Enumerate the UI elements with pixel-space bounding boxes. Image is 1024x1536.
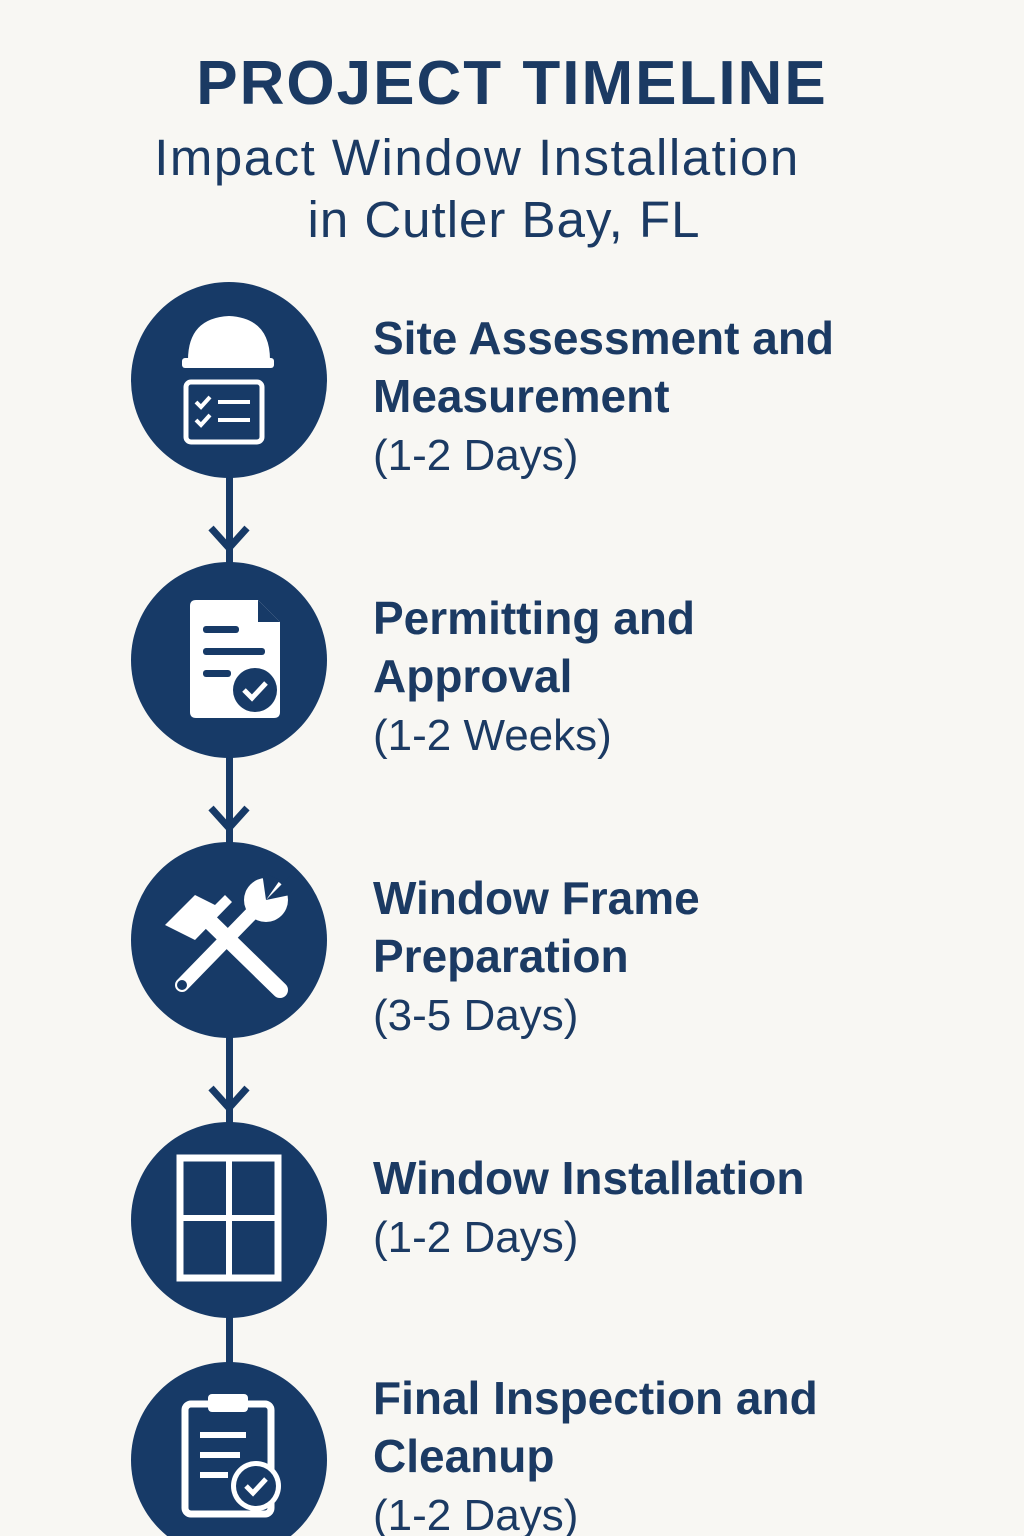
- icon: hard hat and checklist: [131, 282, 327, 478]
- text: step 3: (3-5 Days): [373, 991, 578, 1040]
- icon: document with check: [131, 562, 327, 758]
- timeline connector line: [211, 470, 247, 1370]
- text: step 5: Cleanup: [373, 1430, 554, 1482]
- text: step 2: Approval: [373, 650, 572, 702]
- icon: hammer and wrench: [131, 842, 327, 1038]
- text: step 3: [373, 872, 700, 1040]
- step 4: window installation: [131, 1122, 804, 1318]
- step 1: site assessment: [131, 282, 834, 480]
- title: PROJECT TIMELINE: [196, 49, 828, 118]
- text: step 1: (1-2 Days): [373, 431, 578, 480]
- text: step 2: Permitting and: [373, 592, 695, 644]
- icon: clipboard with check: [131, 1362, 327, 1536]
- step 5: final inspection: [131, 1362, 818, 1536]
- text: step 5: Final Inspection and: [373, 1372, 818, 1424]
- icon: window: [131, 1122, 327, 1318]
- text: step 3: Preparation: [373, 930, 629, 982]
- step 2: permitting: [131, 562, 695, 760]
- text: step 2: [373, 592, 695, 760]
- text: step 5: [373, 1372, 818, 1536]
- text: step 4: (1-2 Days): [373, 1213, 578, 1262]
- text: step 4: [373, 1152, 804, 1262]
- text: step 3: Window Frame: [373, 872, 700, 924]
- subtitle: [154, 129, 800, 248]
- subtitle: Impact Window Installation: [154, 129, 800, 186]
- text: step 4: Window Installation: [373, 1152, 804, 1204]
- step 3: frame preparation: [131, 842, 700, 1040]
- subtitle: in Cutler Bay, FL: [307, 191, 701, 248]
- text: step 1: Site Assessment and: [373, 312, 834, 364]
- text: step 2: (1-2 Weeks): [373, 711, 612, 760]
- text: step 1: [373, 312, 834, 480]
- text: step 1: Measurement: [373, 370, 670, 422]
